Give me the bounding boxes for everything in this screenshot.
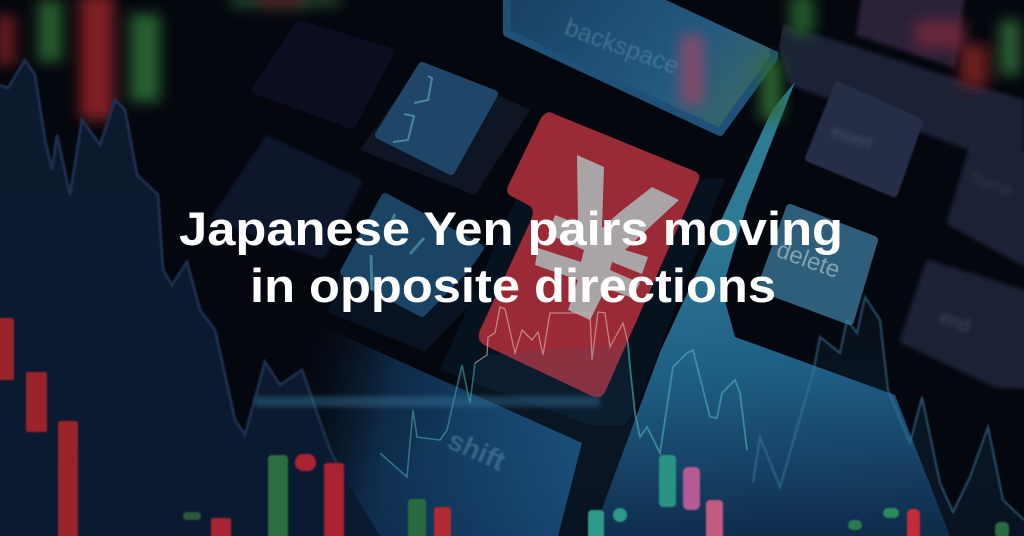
key: bracket key — [360, 62, 530, 195]
right area chart — [380, 297, 1024, 536]
key: home — [951, 142, 1024, 265]
key: insert — [809, 86, 919, 193]
key well below red key — [440, 178, 725, 425]
title — [179, 202, 843, 312]
key: top left dark keys — [216, 24, 390, 255]
key label: delete: delete — [773, 236, 844, 284]
key label: shift: shift — [444, 424, 510, 477]
key: shift — [290, 312, 582, 536]
title line 2: in opposite directions — [250, 259, 776, 312]
title line 1: Japanese Yen pairs moving — [179, 202, 843, 255]
key: return large — [592, 82, 950, 536]
key label: backspace: backspace — [561, 13, 683, 81]
icon: yen symbol — [535, 155, 679, 320]
candlesticks bottom — [183, 454, 1009, 536]
icon: slash glyphs — [371, 214, 424, 290]
key label: insert: insert — [829, 122, 874, 153]
key: slash key — [328, 197, 480, 352]
key: top right blurred key — [856, 0, 965, 68]
key: delete — [761, 208, 874, 321]
keyboard deck band upper right — [770, 20, 1024, 170]
red yen key — [475, 112, 699, 397]
horizontal glow line — [255, 396, 600, 407]
blurred candlesticks top — [0, 0, 1020, 120]
key label: home: home — [969, 168, 1015, 200]
key: end — [904, 264, 1024, 385]
key: backspace — [507, 0, 800, 132]
left area chart — [0, 60, 380, 536]
chart line over red key — [475, 307, 628, 363]
key label: end: end — [936, 307, 973, 338]
icon: bracket glyphs — [393, 76, 432, 142]
candlesticks bottom left — [0, 318, 78, 536]
